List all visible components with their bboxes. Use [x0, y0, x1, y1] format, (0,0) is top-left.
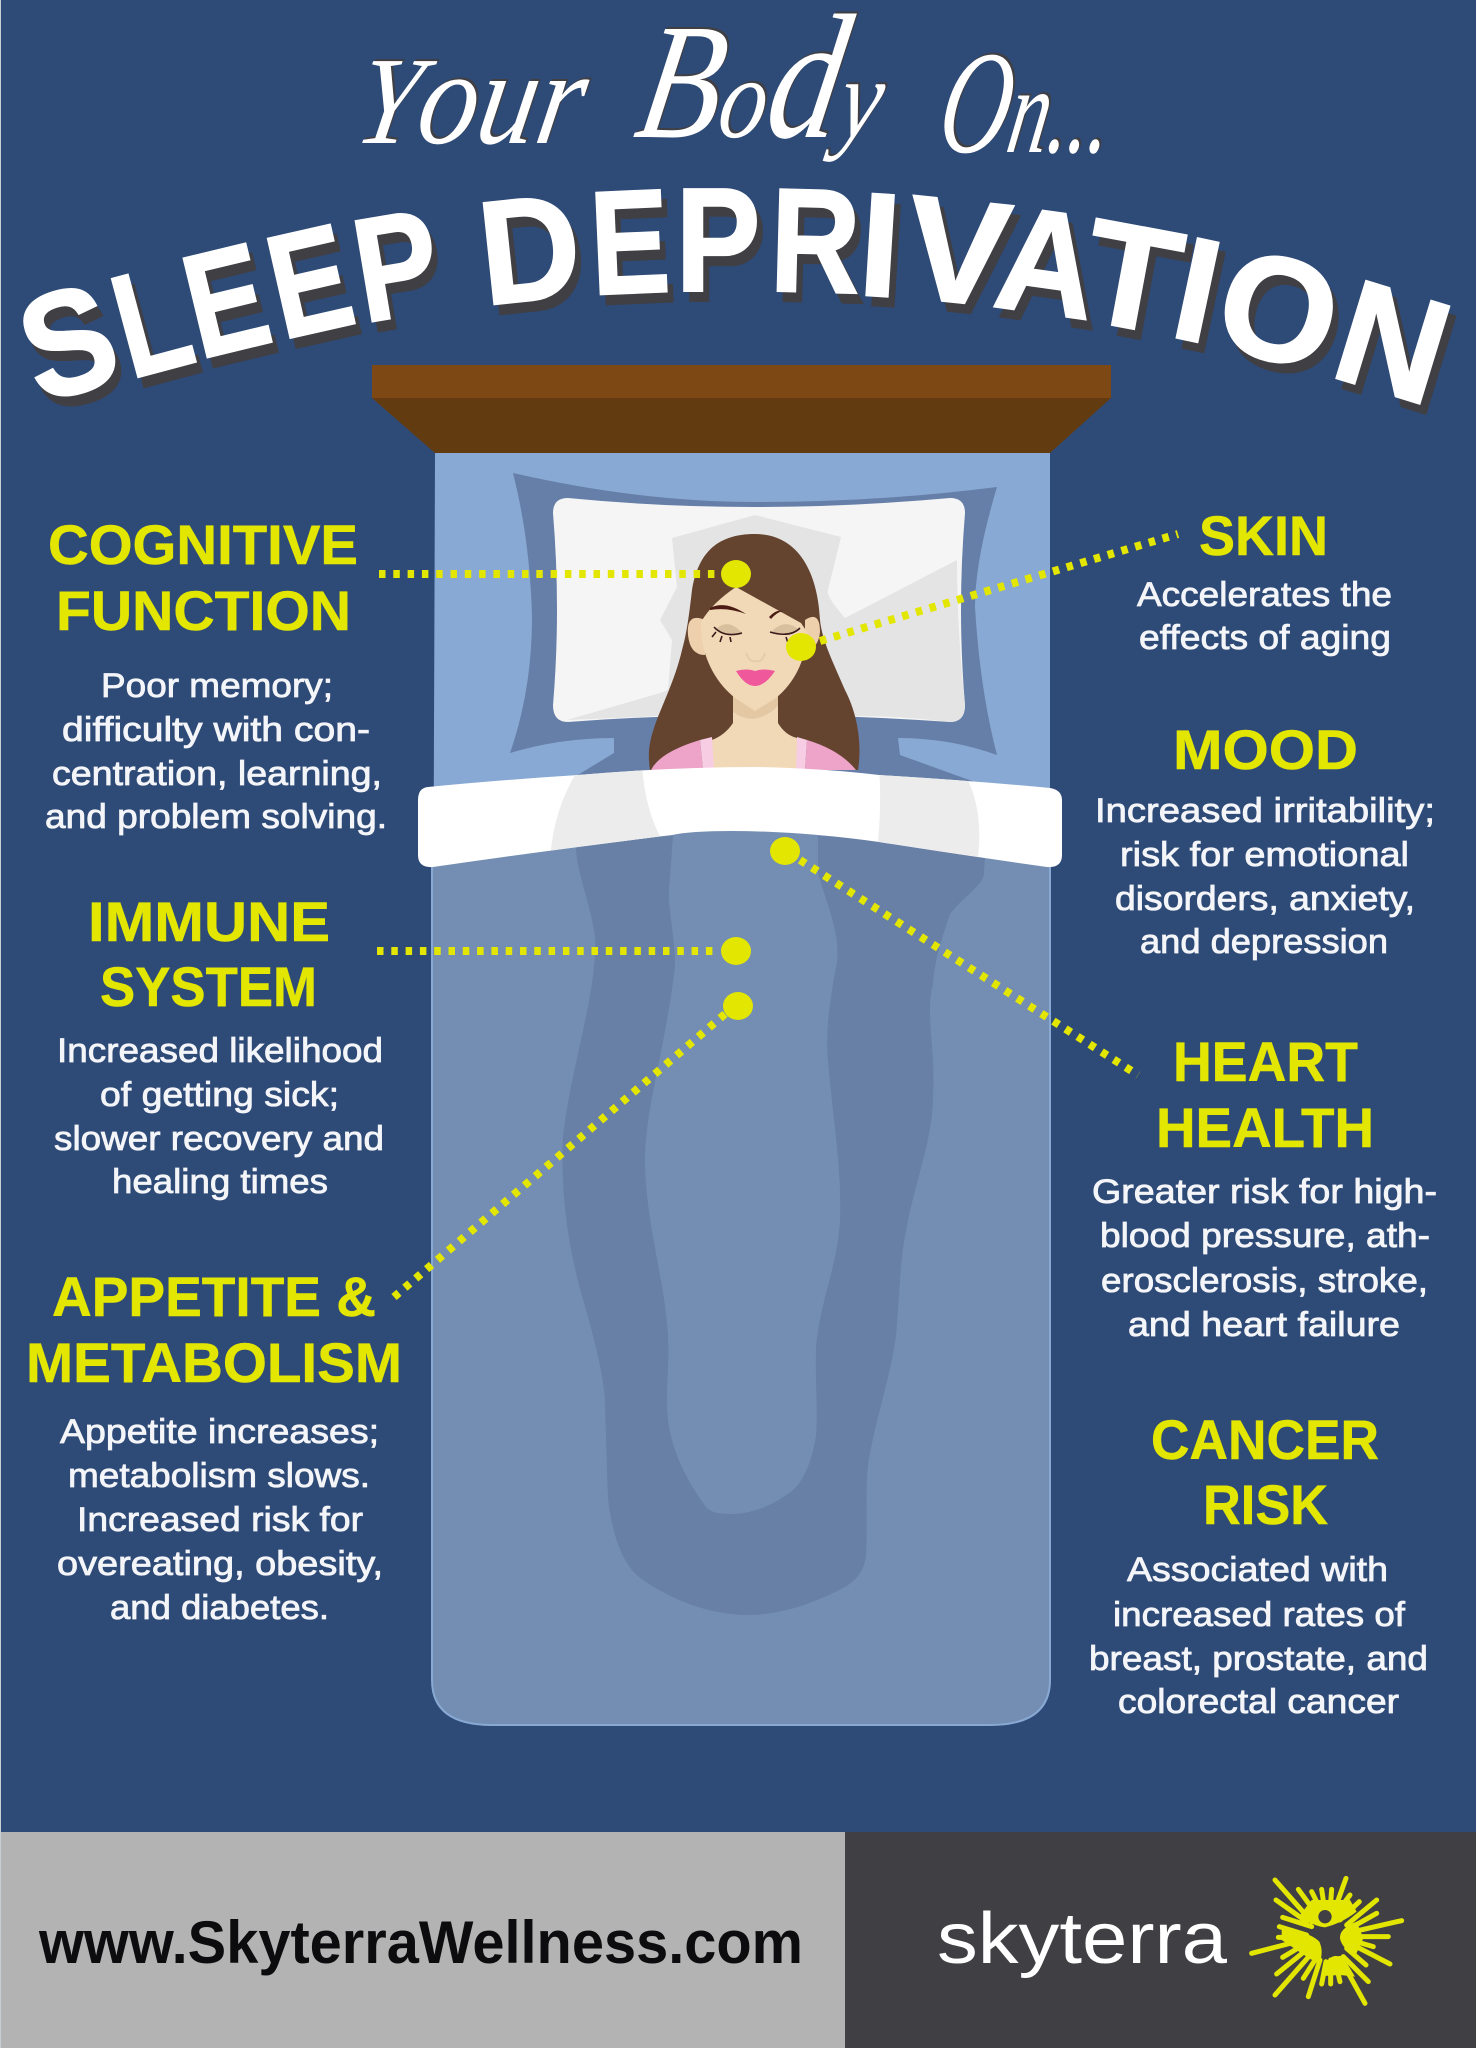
main title: SLEEP DEPRIVATION: T [1070, 188, 1194, 367]
main title: SLEEP DEPRIVATION: D [471, 163, 588, 337]
section: mood [1095, 718, 1435, 961]
section: mood: MOOD [1173, 718, 1358, 781]
script title: Your Body On...: On... [928, 22, 1128, 185]
main title: SLEEP DEPRIVATION: N [1318, 248, 1468, 437]
pillow shadow [510, 473, 997, 790]
icon: skyterra sun figure [1252, 1878, 1402, 2003]
section: appetite and metabolism: APPETITE & [52, 1265, 376, 1328]
pillow [553, 498, 965, 722]
section: skin: effects of aging [1139, 619, 1391, 657]
bed [432, 453, 1050, 1725]
main title: SLEEP DEPRIVATION: E [168, 212, 284, 390]
headboard [372, 365, 1111, 453]
main title: SLEEP DEPRIVATION [1, 157, 1468, 437]
section: appetite and metabolism: overeating, obesity, [57, 1545, 383, 1583]
main title: SLEEP DEPRIVATION: A [986, 175, 1108, 352]
main title: SLEEP DEPRIVATION: P [676, 158, 760, 323]
section: appetite and metabolism [26, 1265, 402, 1627]
main title: SLEEP DEPRIVATION: E [253, 193, 367, 371]
folded sheet [418, 767, 1062, 868]
figure: head halo [1300, 1900, 1357, 1927]
main title: SLEEP DEPRIVATION: O [1201, 215, 1356, 404]
section: cancer risk: breast, prostate, and [1089, 1640, 1428, 1678]
footer bar: website: www.SkyterraWellness.com [38, 1909, 803, 1976]
section: immune system: healing times [112, 1163, 328, 1201]
section: mood: risk for emotional [1120, 836, 1409, 874]
section: cognitive function: and problem solving. [45, 798, 387, 836]
section: heart health: Greater risk for high- [1092, 1173, 1437, 1211]
section: immune system: IMMUNE [88, 890, 330, 953]
neck shadow [733, 695, 778, 719]
section: cancer risk: Associated with [1127, 1551, 1388, 1589]
left edge line [0, 0, 1, 2048]
section: heart health: and heart failure [1128, 1306, 1400, 1344]
woman sleeping [649, 534, 859, 770]
main title: SLEEP DEPRIVATION: L [96, 232, 208, 410]
main title: SLEEP DEPRIVATION: S [1, 250, 136, 435]
section: skin: Accelerates the [1137, 576, 1392, 614]
figure: left arm mass [1282, 1928, 1322, 1964]
main title: SLEEP DEPRIVATION: I [855, 162, 906, 329]
main title: SLEEP DEPRIVATION: R [768, 157, 862, 325]
marker dots [721, 560, 816, 1020]
footer bar: logo [845, 1832, 1476, 2048]
section: skin [1137, 504, 1392, 657]
section: cognitive function: Poor memory; [101, 667, 333, 705]
eyebrows [710, 605, 783, 619]
main title: SLEEP DEPRIVATION: P [342, 177, 451, 354]
figure: right arm mass [1340, 1922, 1363, 1957]
section: immune system [54, 890, 384, 1201]
section: heart health: blood pressure, ath- [1100, 1217, 1430, 1255]
section: skin: SKIN [1199, 504, 1328, 567]
section: cancer risk: colorectal cancer [1118, 1683, 1399, 1721]
neck and chest [712, 695, 797, 770]
section: appetite and metabolism: and diabetes. [110, 1589, 329, 1627]
section: appetite and metabolism: metabolism slows. [68, 1457, 370, 1495]
face [701, 587, 807, 711]
eyelashes [712, 627, 800, 643]
section: appetite and metabolism: METABOLISM [26, 1331, 402, 1394]
section: cognitive function: FUNCTION [56, 579, 351, 642]
section: cognitive function [45, 513, 387, 836]
section: cancer risk: increased rates of [1113, 1596, 1406, 1634]
nose [746, 653, 765, 661]
section: heart health [1092, 1030, 1437, 1344]
section: immune system: SYSTEM [100, 955, 317, 1018]
section: cognitive function: COGNITIVE [48, 513, 358, 576]
section: heart health: HEALTH [1156, 1096, 1374, 1159]
lips [736, 670, 775, 686]
section: cognitive function: centration, learning, [52, 755, 382, 793]
ears [688, 617, 820, 655]
main title: SLEEP DEPRIVATION: V [899, 163, 1018, 339]
figure: lower mass [1323, 1956, 1355, 1977]
section: mood: disorders, anxiety, [1115, 880, 1415, 918]
section: cancer risk: CANCER [1151, 1408, 1379, 1471]
main title: SLEEP DEPRIVATION: E [587, 159, 673, 327]
shirt [651, 740, 856, 770]
shirt trim [700, 737, 807, 770]
figure: head [1318, 1910, 1332, 1923]
eyelids [715, 624, 799, 634]
footer bar: logo: skyterra [937, 1899, 1228, 1979]
section: cognitive function: difficulty with con- [62, 711, 370, 749]
script title: Your Body On... [347, 0, 1128, 185]
section: appetite and metabolism: Increased risk for [77, 1501, 363, 1539]
section: cancer risk: RISK [1203, 1473, 1328, 1536]
section: appetite and metabolism: Appetite increases; [60, 1413, 379, 1451]
section: heart health: erosclerosis, stroke, [1101, 1262, 1428, 1300]
script title: Your Body On...: Your [347, 23, 600, 172]
dotted connector lines [377, 534, 1178, 1297]
section: mood: and depression [1140, 923, 1388, 961]
body silhouette under blanket [562, 836, 986, 1615]
section: mood: Increased irritability; [1095, 792, 1435, 830]
section: immune system: of getting sick; [100, 1076, 339, 1114]
section: heart health: HEART [1173, 1030, 1358, 1093]
main title: SLEEP DEPRIVATION: I [1160, 206, 1235, 376]
footer bar: website [0, 1832, 845, 2048]
section: cancer risk [1089, 1408, 1428, 1721]
section: immune system: slower recovery and [54, 1120, 384, 1158]
hair [649, 534, 859, 770]
section: immune system: Increased likelihood [57, 1032, 383, 1070]
